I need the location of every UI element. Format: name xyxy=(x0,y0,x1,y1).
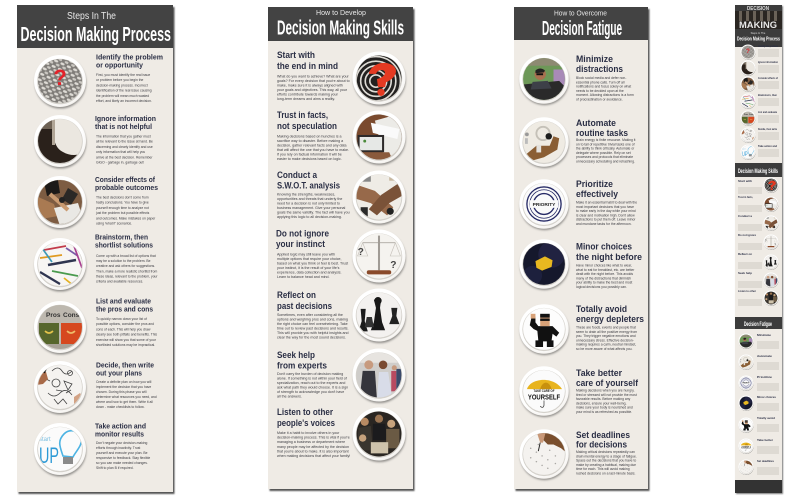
step: consider effects: just the problem but possible effects xyxy=(95,211,150,215)
tip: take better care of yourself: Making decisions when you are hungry, xyxy=(576,388,635,392)
thumbnail column: skills: Trust in facts, xyxy=(738,195,753,199)
tip: automate routine tasks: delegate where possible. Rely on set xyxy=(576,151,631,155)
thumbnail header: decision making: DECISION xyxy=(747,6,769,12)
tip: do not ignore your instinct: experience, data collection and analysis. xyxy=(277,270,342,274)
thumbnail column: process steps: Identify the problem xyxy=(758,44,779,48)
tip: reflect on past decisions: Sometimes, even after considering all the xyxy=(277,313,343,317)
tip: do not ignore your instinct: your instinct, it is the result of your life's xyxy=(277,266,340,270)
step: brainstorm: shortlist solutions xyxy=(95,240,153,250)
icon: gold shape on dark xyxy=(519,239,569,290)
tip: minimize distractions: needs to be decided upon at the xyxy=(576,89,624,93)
step: decide then write: down - make checklists to follow. xyxy=(96,405,145,409)
tip: set deadlines for decisions: Space out the decisions that you have to xyxy=(576,459,636,463)
thumbnail column: process steps: Decide, then write xyxy=(758,127,777,131)
tip: prioritize effectively: distractions to put them off. Leave minor xyxy=(576,218,636,222)
tip: minimize distractions: Block social media and defer non- xyxy=(576,76,626,80)
tip: trust in facts: that will affect the one that you have to make. xyxy=(277,148,349,152)
tip: seek help from experts: all the answers. xyxy=(277,394,302,398)
tip: prioritize effectively: Prioritize xyxy=(576,179,613,189)
icon: hands over paper xyxy=(34,176,86,229)
tip: totally avoid energy depleters: Totally avoid xyxy=(576,304,627,314)
header: decision making skills xyxy=(268,7,413,41)
thumbnail header: decision making skills xyxy=(735,163,782,177)
step: take action: monitor results xyxy=(95,430,144,438)
step: brainstorm: criteria and available resources. xyxy=(96,280,143,284)
tip: reflect on past decisions xyxy=(277,290,349,340)
tip: do not ignore your instinct: Learn to balance head and mind. xyxy=(277,275,330,279)
tip: take better care of yourself xyxy=(576,368,639,414)
step: consider effects: hasty conclusions. You have to give xyxy=(96,201,149,205)
step: consider effects xyxy=(95,175,158,226)
tip: do not ignore your instinct: based on what you think or feel is best. Trust xyxy=(277,262,348,266)
tip: take better care of yourself: care of yourself xyxy=(576,378,639,388)
icon: pebbles question mark xyxy=(34,55,86,108)
tip: listen to other people's voices xyxy=(277,407,350,458)
header: decision making skills: Decision Making Skills xyxy=(277,18,404,40)
step: list and evaluate: List and evaluate xyxy=(96,296,151,306)
tip: trust in facts: Making decisions based on hunches is a xyxy=(277,134,342,138)
tip: prioritize effectively: effectively xyxy=(576,189,618,199)
tip: swot analysis: need for a decision is not only limited to xyxy=(277,202,340,206)
icon: dark curve photo xyxy=(34,115,86,168)
tip: start with the end in mind: long-term dreams and aims a reality. xyxy=(277,97,335,101)
tip: listen to other people's voices: people's voices xyxy=(277,418,335,429)
icon: umbrella take care of yourself xyxy=(519,366,569,417)
tip: swot analysis: applying this logic to all decision-making. xyxy=(277,215,342,219)
tip: start with the end in mind xyxy=(277,50,350,101)
tip: seek help from experts: of strength to acknowledge you don't have xyxy=(277,390,344,394)
icon: start up light bulb xyxy=(34,423,86,476)
step: identify the problem: First, you must identify the real issue xyxy=(96,73,150,77)
icon: joined hands xyxy=(352,170,406,225)
header: decision fatigue: How to Overcome xyxy=(554,8,607,18)
tip: set deadlines for decisions xyxy=(576,430,637,476)
tip: automate routine tasks: the ability to think critically. Automate or xyxy=(576,147,635,151)
tip: automate routine tasks: routine tasks xyxy=(576,128,628,138)
header: decision fatigue xyxy=(514,7,648,40)
tip: seek help from experts: specialization, reach out to the experts and xyxy=(277,381,345,385)
step: identify the problem: Identify the problem xyxy=(96,52,163,62)
header: decision making process: Steps In The xyxy=(67,11,116,22)
tip: prioritize effectively: most important decisions that you have xyxy=(576,205,634,209)
tip: seek help from experts: Don't carry the burden of decision making xyxy=(277,372,343,376)
thumbnail column: process steps: Ignore information xyxy=(758,60,778,64)
tip: prioritize effectively: is clear and motivation high. Don't allow xyxy=(576,213,635,217)
step: identify the problem: or opportunity xyxy=(96,60,144,70)
tip: seek help from experts: Seek help xyxy=(277,350,315,361)
tip: prioritize effectively xyxy=(576,179,637,226)
thumbnail column: process steps: List and evaluate xyxy=(758,110,778,114)
step: consider effects: The best decisions don't come from xyxy=(96,196,149,200)
step: brainstorm: Then, make a more realistic shortlist from xyxy=(96,269,158,273)
icon: brainstorm words xyxy=(34,238,86,291)
step: brainstorm xyxy=(95,232,158,284)
thumbnail column: fatigue: Take better xyxy=(757,438,773,442)
tip: minor choices the night before: logical decisions you possibly can. xyxy=(576,285,627,289)
thumbnail column: fatigue: Minor choices xyxy=(757,395,777,399)
tip: automate routine tasks: processes and protocols that eliminate xyxy=(576,155,633,159)
thumbnail header: decision making: MAKING xyxy=(739,20,777,30)
step: take action xyxy=(95,422,150,470)
panel: combined thumbnail of all three infographics xyxy=(735,5,783,494)
header: decision fatigue: Decision Fatigue xyxy=(542,18,622,40)
thumbnail column: process steps: Take action and xyxy=(758,144,777,148)
tip: take better care of yourself: Take better xyxy=(576,368,622,378)
step: decide then write xyxy=(96,360,157,409)
step: list and evaluate xyxy=(96,296,157,347)
tip: listen to other people's voices: managing a business or department where xyxy=(277,440,345,444)
tip: set deadlines for decisions: time for each. This will avoid making xyxy=(576,467,630,471)
tip: seek help from experts: ask what path they would choose. It is a sign xyxy=(277,386,348,390)
tip: do not ignore your instinct xyxy=(276,228,348,279)
panel: how to develop decision making skills xyxy=(268,7,414,491)
step: decide then write: Decide, then write xyxy=(96,360,154,370)
icon: chess pieces xyxy=(352,288,406,343)
thumbnail column: skills: Reflect on xyxy=(738,252,752,256)
step: consider effects: using 'what if' scenarios. xyxy=(96,222,132,226)
thumbnail column: skills: Start with xyxy=(738,179,752,183)
tip: listen to other people's voices: many people may be affected by the decision xyxy=(277,445,349,449)
tip: totally avoid energy depleters: you. They trigger negative emotions and xyxy=(576,334,636,338)
tip: prioritize effectively: and mundane tasks for the afternoon. xyxy=(576,222,632,226)
tip: totally avoid energy depleters: making requires a calm, neutral mindset, xyxy=(576,343,636,347)
tip: totally avoid energy depleters xyxy=(576,304,644,351)
step: take action: Don't negate your decision-making xyxy=(96,441,148,445)
tip: trust in facts: decision, gather relevant facts and any data xyxy=(277,144,347,148)
tip: minimize distractions: notifications and focus solely on what xyxy=(576,85,631,89)
thumbnail header: decision making: Steps In The xyxy=(751,31,766,35)
step: ignore information: discerning and clearly identify and use xyxy=(96,145,153,149)
thumbnail header: decision fatigue: Decision Fatigue xyxy=(744,322,772,328)
step: consider effects: probable outcomes xyxy=(95,183,158,192)
tip: do not ignore your instinct: Do not ignore xyxy=(276,228,329,240)
step: decide then write: where and how to get them. Write it all xyxy=(96,400,153,404)
tip: trust in facts: If you rely on factual information it will be xyxy=(277,152,342,156)
step: decide then write: Create a definite plan on how you will xyxy=(96,380,152,384)
tip: minor choices the night before: many of the distractions that diminish xyxy=(576,276,631,280)
tip: automate routine tasks: unnecessary scheduling and rehashing. xyxy=(576,160,635,164)
tip: minimize distractions xyxy=(576,54,634,102)
step: ignore information: that is not helpful xyxy=(95,122,152,131)
thumbnail column: skills: Listen to other xyxy=(738,289,756,293)
step: decide then write: out your plans xyxy=(96,368,142,378)
thumbnail column: fatigue: Set deadlines xyxy=(757,459,775,463)
tip: start with the end in mind: the end in mind xyxy=(277,61,338,72)
tip: minor choices the night before: dealt with the night before. This avoids xyxy=(576,272,633,276)
icon: group of colleagues xyxy=(352,407,406,462)
tip: set deadlines for decisions: Set deadlines xyxy=(576,430,630,440)
header: decision making skills: How to Develop xyxy=(316,8,366,17)
tip: swot analysis: Knowing the strengths, weaknesses, xyxy=(277,192,335,196)
step: consider effects: and outcomes. Make mistakes on paper xyxy=(96,216,156,220)
icon: scales with question marks xyxy=(352,229,406,284)
tip: automate routine tasks: Automate xyxy=(576,118,616,128)
thumbnail column: fatigue xyxy=(738,333,779,475)
thumbnail footer xyxy=(735,480,782,493)
tip: start with the end in mind: efforts contribute towards making your xyxy=(277,92,339,96)
thumbnail column: fatigue: Totally avoid xyxy=(757,416,775,420)
tip: prioritize effectively: to make early in the day while your mind xyxy=(576,209,636,213)
header: decision making process xyxy=(17,5,173,48)
tip: reflect on past decisions: the right choice can feel overwhelming. Take xyxy=(277,322,348,326)
step: ignore information: only information that will help you xyxy=(96,150,145,154)
tip: reflect on past decisions: clear the way for the most sound decisions. xyxy=(277,336,346,340)
tip: swot analysis: S.W.O.T. analysis xyxy=(277,180,340,192)
tip: do not ignore your instinct: Applied logic may still leave you with xyxy=(277,252,335,256)
tip: take better care of yourself: favorable results. Before making any xyxy=(576,397,631,401)
tip: start with the end in mind: your goals and objectives. This way, all your xyxy=(277,88,348,92)
step: brainstorm: may be a solution to the problem. Be xyxy=(96,259,151,263)
tip: totally avoid energy depleters: unnecessary stress. Effective decision- xyxy=(576,338,634,342)
tip: take better care of yourself: your mind is as refreshed as possible. xyxy=(576,410,632,414)
tip: trust in facts: Trust in facts, xyxy=(277,110,328,121)
tip: minor choices the night before: Have minor choices like what to wear, xyxy=(576,264,632,268)
thumbnail column: process steps xyxy=(740,44,779,160)
tip: minimize distractions: moment. Allowing distractions is a form xyxy=(576,93,634,97)
tip: minimize distractions: distractions xyxy=(576,64,623,74)
thumbnail column: skills xyxy=(738,177,779,306)
step: take action: Take action and xyxy=(95,422,146,430)
tip: swot analysis: business management. Give your personal xyxy=(277,206,346,210)
tip: minor choices the night before: what to eat for breakfast, etc. are better xyxy=(576,268,635,272)
step: take action: efforts through inactivity. Trust xyxy=(96,446,140,450)
thumbnail column: fatigue: Prioritize xyxy=(757,375,773,379)
tip: trust in facts: not speculation xyxy=(277,121,337,132)
thumbnail column: process steps: Consider effects of xyxy=(758,76,778,80)
header: decision making process: Decision Making Process xyxy=(20,24,171,46)
tip: reflect on past decisions: past decisions xyxy=(277,301,332,312)
icon: laptop and papers xyxy=(352,110,406,165)
tip: swot analysis: opportunities and threats that underly the xyxy=(277,197,342,201)
step: identify the problem: or problem before you begin the xyxy=(96,78,144,82)
step: ignore information: all be relevant to the issue at hand. Be xyxy=(96,140,153,144)
tip: minor choices the night before: Minor choices xyxy=(576,242,632,252)
step: identify the problem xyxy=(96,52,163,103)
icon: maze question mark xyxy=(351,51,406,106)
step: identify the problem: the problem will mean much wasted xyxy=(96,94,149,98)
tip: trust in facts: sacrifice way to disaster. Before making a xyxy=(277,139,343,143)
step: list and evaluate: shortlisted solutions may be impractical. xyxy=(96,343,155,347)
icon: hand on calendar xyxy=(519,429,569,480)
step: ignore information xyxy=(95,114,156,164)
thumbnail column: fatigue: Minimize xyxy=(757,333,772,337)
icon: pros and cons boxes xyxy=(34,301,86,354)
step: list and evaluate: cons of each. This will help you draw xyxy=(96,327,151,331)
tip: listen to other people's voices: decision-making process. This is vital if you're xyxy=(277,436,350,440)
tip: reflect on past decisions: This will provide you with helpful insights and xyxy=(277,331,349,335)
tip: reflect on past decisions: options and weighing pros and cons, making xyxy=(277,318,348,322)
step: list and evaluate: clearly see both pitfalls and benefits. This xyxy=(96,333,157,337)
step: decide then write: chosen. During this phase you will xyxy=(96,390,147,394)
tip: automate routine tasks xyxy=(576,118,636,164)
icon: priority stamp xyxy=(519,179,569,230)
tip: totally avoid energy depleters: These are foods, events and people that xyxy=(576,326,636,330)
icon: hand sketching plans xyxy=(34,361,86,414)
tip: reflect on past decisions: Reflect on xyxy=(277,290,316,301)
tip: do not ignore your instinct: your instinct xyxy=(276,239,326,250)
step: ignore information: arrive at the best decision. Remember xyxy=(96,155,153,159)
thumbnail header: decision fatigue xyxy=(735,317,782,329)
tip: seek help from experts xyxy=(277,350,348,398)
step: list and evaluate: To quickly narrow down your list of xyxy=(96,317,147,321)
tip: swot analysis: goals the same validity. The fact will have you xyxy=(277,210,350,214)
tip: set deadlines for decisions: make by creating a habitual, making due xyxy=(576,463,636,467)
step: identify the problem: decision-making process. Incorrect xyxy=(96,83,148,87)
tip: automate routine tasks: on to tail of repetitive trivial tasks one of xyxy=(576,142,635,146)
tip: trust in facts xyxy=(277,110,349,161)
step: take action: so you can make needed changes. xyxy=(96,461,148,465)
tip: trust in facts: easier to make decisions based on logic. xyxy=(277,157,342,161)
step: brainstorm: these ideas, relevant to the problem, your xyxy=(96,274,158,278)
tip: take better care of yourself: tired or stressed will not provide the most xyxy=(576,393,637,397)
tip: reflect on past decisions: time out to review past decisions and results. xyxy=(277,326,349,330)
panel: how to overcome decision fatigue xyxy=(514,7,650,491)
tip: seek help from experts: alone. If something is not within your field of xyxy=(277,376,347,380)
thumbnail column: skills: Conduct a xyxy=(738,214,753,218)
step: take action: yourself and execute your plan. Be xyxy=(96,451,148,455)
step: list and evaluate: exercise will show you that some of your xyxy=(96,338,157,342)
tip: listen to other people's voices: Make it a habit to involve others in your xyxy=(277,431,340,435)
tip: set deadlines for decisions: for decisions xyxy=(576,440,627,450)
tip: take better care of yourself: make sure your body is nourished and xyxy=(576,406,633,410)
step: decide then write: determine what resources you need, and xyxy=(96,395,157,399)
tip: set deadlines for decisions: Making critical decisions repeatedly can xyxy=(576,450,635,454)
step: list and evaluate: the pros and cons xyxy=(96,304,153,314)
step: consider effects: yourself enough time to analyze not xyxy=(96,206,149,210)
thumbnail column: fatigue: Automate xyxy=(757,354,773,358)
step: take action: responsive to feedback. Stay flexible xyxy=(96,456,150,460)
step: brainstorm: Brainstorm, then xyxy=(95,232,148,242)
tip: minor choices the night before xyxy=(576,242,642,289)
tip: minor choices the night before: your ability to make the best and most xyxy=(576,281,632,285)
icon: bodyguard stop gesture xyxy=(519,304,569,355)
tip: automate routine tasks: Brain energy is finite resource. Making it xyxy=(576,138,636,142)
tip: minimize distractions: of procrastination or avoidance. xyxy=(576,98,623,102)
tip: prioritize effectively: Make it an essential habit to deal with the xyxy=(576,200,637,204)
tip: minimize distractions: essential phone calls. Turn off all xyxy=(576,80,625,84)
tip: seek help from experts: from experts xyxy=(277,360,327,372)
step: consider effects: Consider effects of xyxy=(95,175,155,184)
tip: minimize distractions: Minimize xyxy=(576,54,613,64)
panel: steps in the decision making process xyxy=(17,5,174,494)
icon: business experts xyxy=(352,348,406,403)
tip: start with the end in mind: make, make sure it is always aligned with xyxy=(277,84,343,88)
thumbnail header: decision making xyxy=(735,5,782,47)
tip: set deadlines for decisions: rushed decisions on a last-minute basis. xyxy=(576,472,636,476)
step: ignore information: Ignore information xyxy=(95,114,156,123)
step: list and evaluate: possible options, consider the pros and xyxy=(96,322,154,326)
icon: man at laptop xyxy=(519,54,569,105)
step: brainstorm: creative and ask others for suggestions. xyxy=(96,264,155,268)
tip: listen to other people's voices: Listen to other xyxy=(277,407,333,418)
step: ignore information: GIGO - garbage in, garbage out! xyxy=(96,160,144,164)
step: brainstorm: Come up with a broad list of options that xyxy=(96,254,156,258)
step: take action: Shift to plan B if required. xyxy=(96,466,134,470)
icon: hand holding clock xyxy=(519,117,569,168)
tip: totally avoid energy depleters: seem to drain all the positive energy from xyxy=(576,330,637,334)
tip: listen to other people's voices: that you're about to make. It is also important xyxy=(277,449,349,453)
tip: swot analysis xyxy=(277,170,350,219)
step: identify the problem: identification of the real issue causing xyxy=(96,89,152,93)
tip: set deadlines for decisions: drain mental energy to a stage of fatigue. xyxy=(576,454,637,458)
tip: start with the end in mind: What do you want to achieve? What are your xyxy=(277,74,350,78)
step: identify the problem: effort, and likely an incorrect decision. xyxy=(96,99,152,103)
tip: totally avoid energy depleters: so be more aware of what affects you. xyxy=(576,347,633,351)
thumbnail column: process steps: Brainstorm, then xyxy=(758,93,777,97)
tip: start with the end in mind: Start with xyxy=(277,50,315,61)
tip: do not ignore your instinct: multiple options that require your choice, xyxy=(277,257,342,261)
tip: totally avoid energy depleters: energy depleters xyxy=(576,314,644,324)
thumbnail column: skills: Seek help xyxy=(738,271,752,275)
thumbnail column: skills: Do not ignore xyxy=(738,233,757,237)
tip: listen to other people's voices: when making decisions that affect your family! xyxy=(277,454,350,458)
step: ignore information: The information that you gather must xyxy=(96,134,151,138)
tip: swot analysis: Conduct a xyxy=(277,170,318,181)
tip: take better care of yourself: decisions, ensure your well-being, xyxy=(576,401,626,405)
tip: minor choices the night before: the night before xyxy=(576,252,642,262)
tip: start with the end in mind: goals? For every decision that you're about to xyxy=(277,79,350,83)
step: decide then write: implement the decision that you have xyxy=(96,385,151,389)
